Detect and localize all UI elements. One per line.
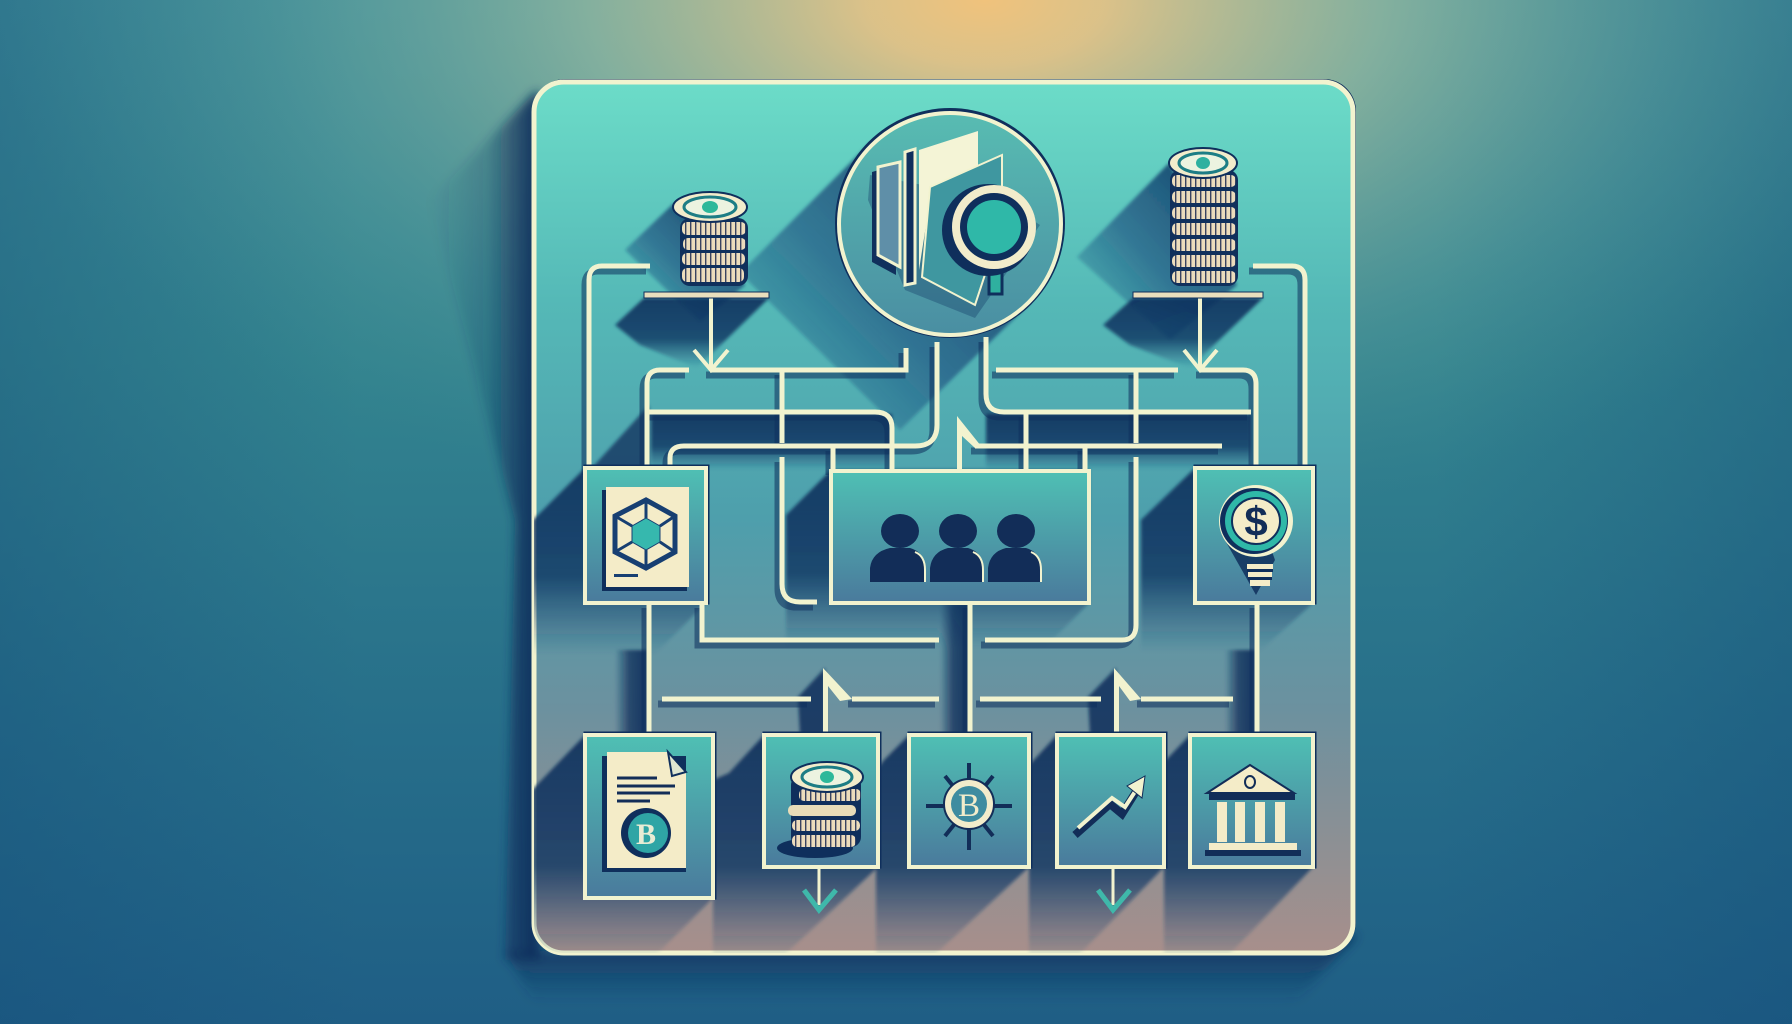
icon: left page [878,162,900,267]
icon: thin page [905,149,915,285]
shelf: left [644,292,769,298]
main panel [533,79,1356,954]
icon: bank building [1205,765,1301,856]
arrow: central up arrow [957,416,981,470]
box: growth arrow [1057,734,1165,867]
icon: teal folder [922,155,1002,305]
icon: bitcoin coin: B [636,818,656,851]
cast shadows [532,143,1313,962]
connector lines [585,266,1305,740]
icon: magnifier [942,184,1036,294]
circle: document search [835,108,1065,338]
icon: chart arrow [1075,776,1145,835]
box: team [831,471,1089,603]
arrow: left coins down [694,298,728,370]
shelf: right [1133,292,1263,298]
box: bitcoin wheel [909,734,1030,867]
panel drop shadow [430,92,1358,1002]
icon: person 3 [988,514,1041,582]
icon: cream paper [919,131,978,270]
arrow: right coins down [1184,298,1217,370]
icon: dollar bulb: $ [1244,498,1268,545]
icon: bitcoin wheel hub: B [958,788,980,824]
box: bank [1190,734,1314,867]
arrow: output right [1098,867,1130,910]
icon: wheel spokes [926,763,1012,850]
box: bitcoin document [585,734,714,898]
arrow: lower right up arrow [1114,668,1141,735]
icon: left coin stack [673,192,748,286]
box: idea bulb [1195,467,1314,603]
box: coins [764,734,879,867]
arrow: lower left up arrow [823,668,852,735]
icon: gem [615,500,675,568]
icon: person 2 [930,514,983,582]
arrow: output left [804,867,836,910]
icon: bitcoin coin [621,808,671,858]
icon: person 1 [870,514,925,582]
box: gem document [585,467,707,603]
icon: right coin stack [1169,148,1238,286]
